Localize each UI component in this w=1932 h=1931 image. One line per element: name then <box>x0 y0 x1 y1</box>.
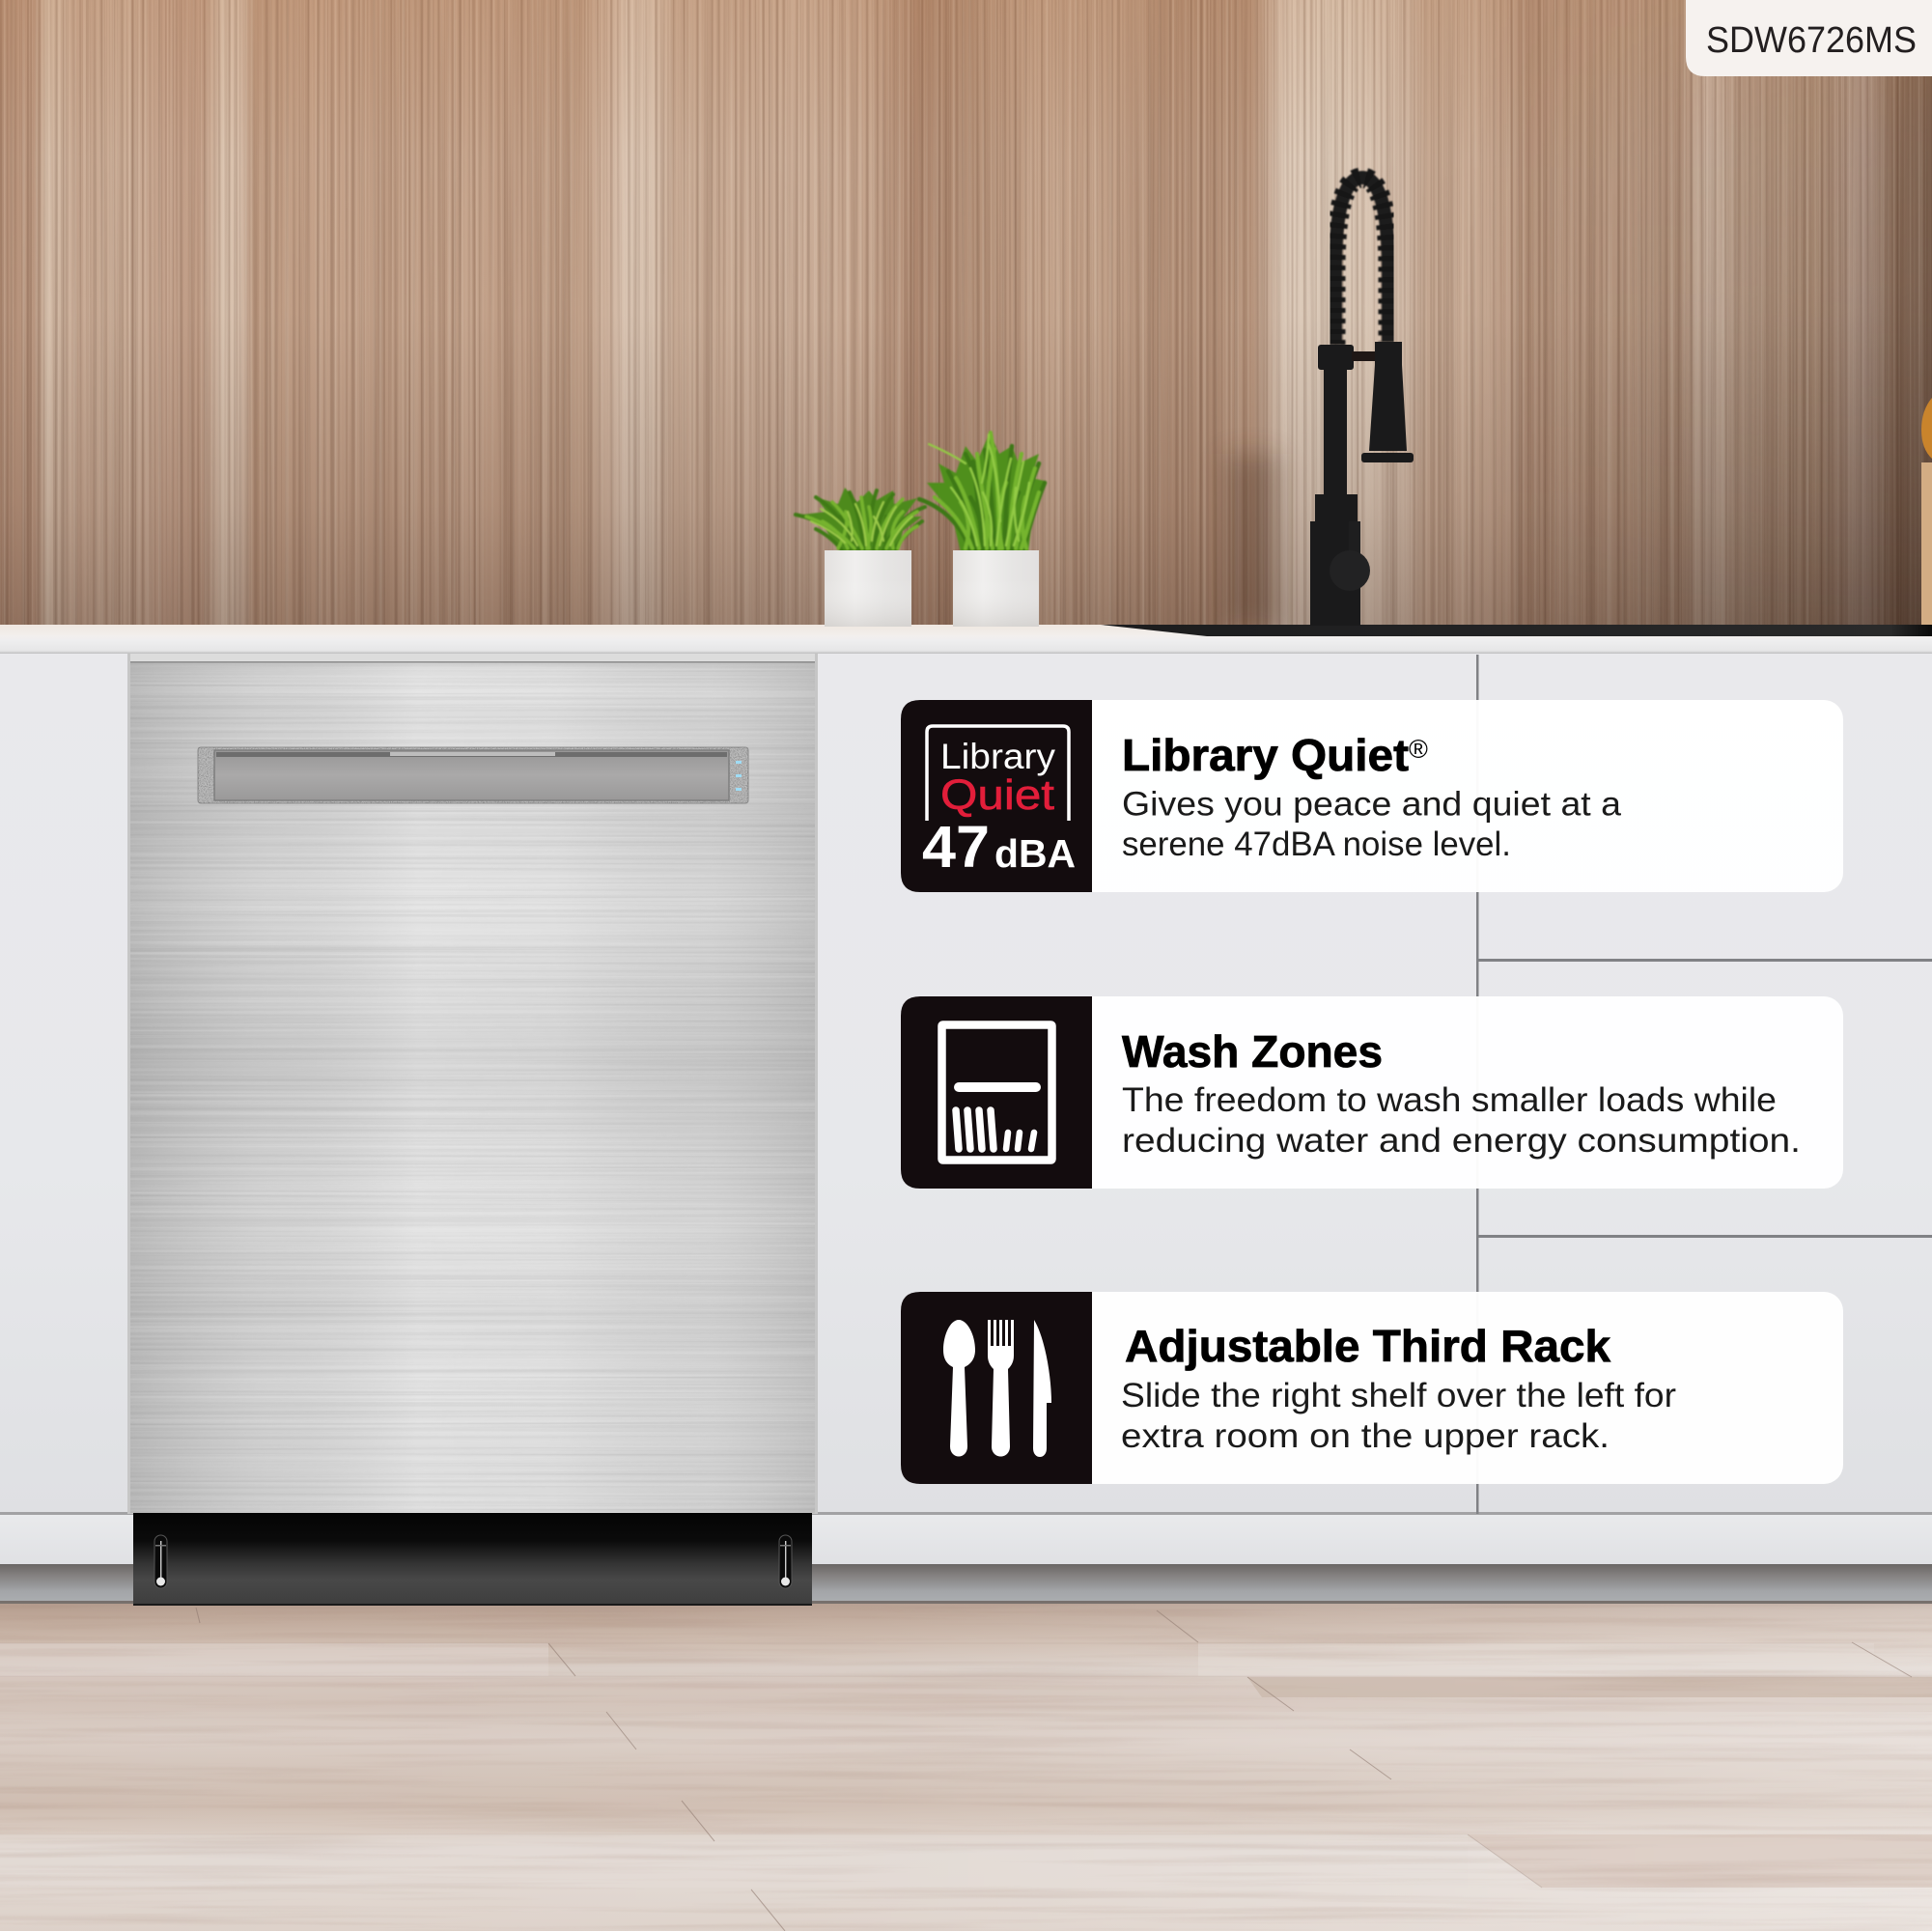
icon: Library Quiet 47 dBA badge: Quiet <box>940 771 1054 819</box>
icon: dishwasher rack <box>901 996 1092 1189</box>
decor at right edge: box and fruit <box>1921 398 1932 625</box>
icon: Library Quiet 47 dBA badge: 47 <box>922 814 990 880</box>
knife <box>1033 1320 1051 1457</box>
floor plank patches <box>0 1643 1932 1888</box>
heading: Adjustable Third Rack <box>1125 1321 1610 1371</box>
cabinet door seams <box>1476 655 1932 1514</box>
floor <box>0 1603 1932 1931</box>
icon: Library Quiet 47 dBA badge <box>901 700 1092 892</box>
body text: reducing water and energy consumption. <box>1122 1122 1801 1160</box>
floor plank seams <box>0 1608 1932 1931</box>
stainless door <box>130 661 815 1513</box>
sprayer head <box>1369 342 1407 451</box>
icon: spoon, fork and knife <box>901 1292 1092 1484</box>
card: Adjustable Third Rack <box>901 1292 1843 1484</box>
body text: extra room on the upper rack. <box>1121 1417 1610 1455</box>
heading: Library Quiet <box>1122 730 1409 780</box>
toe kick shadow <box>0 1564 1932 1603</box>
toe panel <box>0 1514 1932 1564</box>
body text: The freedom to wash smaller loads while <box>1122 1081 1777 1119</box>
icon: Library Quiet 47 dBA badge: Library <box>940 737 1056 776</box>
right slot <box>779 1535 792 1588</box>
body text: Gives you peace and quiet at a <box>1122 786 1622 823</box>
body text: Slide the right shelf over the left for <box>1121 1377 1676 1414</box>
model number tag: SDW6726MS <box>1706 20 1917 61</box>
sink <box>1101 625 1932 636</box>
faucet base <box>1310 494 1360 626</box>
left slot <box>154 1535 167 1588</box>
fork <box>988 1320 1014 1456</box>
handle and control panel <box>198 747 748 803</box>
body text <box>1122 786 1622 863</box>
icon: Library Quiet 47 dBA badge: dBA <box>994 831 1076 876</box>
card: Wash Zones <box>901 996 1843 1189</box>
registered mark: ® <box>1409 735 1428 764</box>
card: Library Quiet <box>901 700 1843 892</box>
cabinets <box>0 653 1932 1604</box>
white pot left <box>825 550 911 627</box>
heading: Wash Zones <box>1122 1026 1383 1077</box>
black kick plate <box>133 1513 812 1606</box>
spoon <box>943 1320 975 1456</box>
body text <box>1122 1081 1801 1160</box>
door frame <box>127 654 818 1514</box>
model number tag <box>1686 0 1932 76</box>
potted plants <box>796 433 1045 627</box>
plant left <box>796 488 925 552</box>
countertop <box>0 625 1932 654</box>
white pot right <box>953 550 1039 627</box>
status lights <box>736 761 742 791</box>
lever knob <box>1330 550 1370 591</box>
wood panel wall <box>0 0 1932 628</box>
plant right <box>919 433 1045 552</box>
body text <box>1121 1377 1676 1455</box>
dishwasher <box>127 654 818 1606</box>
black faucet <box>1310 178 1414 626</box>
body text: serene 47dBA noise level. <box>1122 826 1511 863</box>
faucet spring hose <box>1335 178 1388 345</box>
